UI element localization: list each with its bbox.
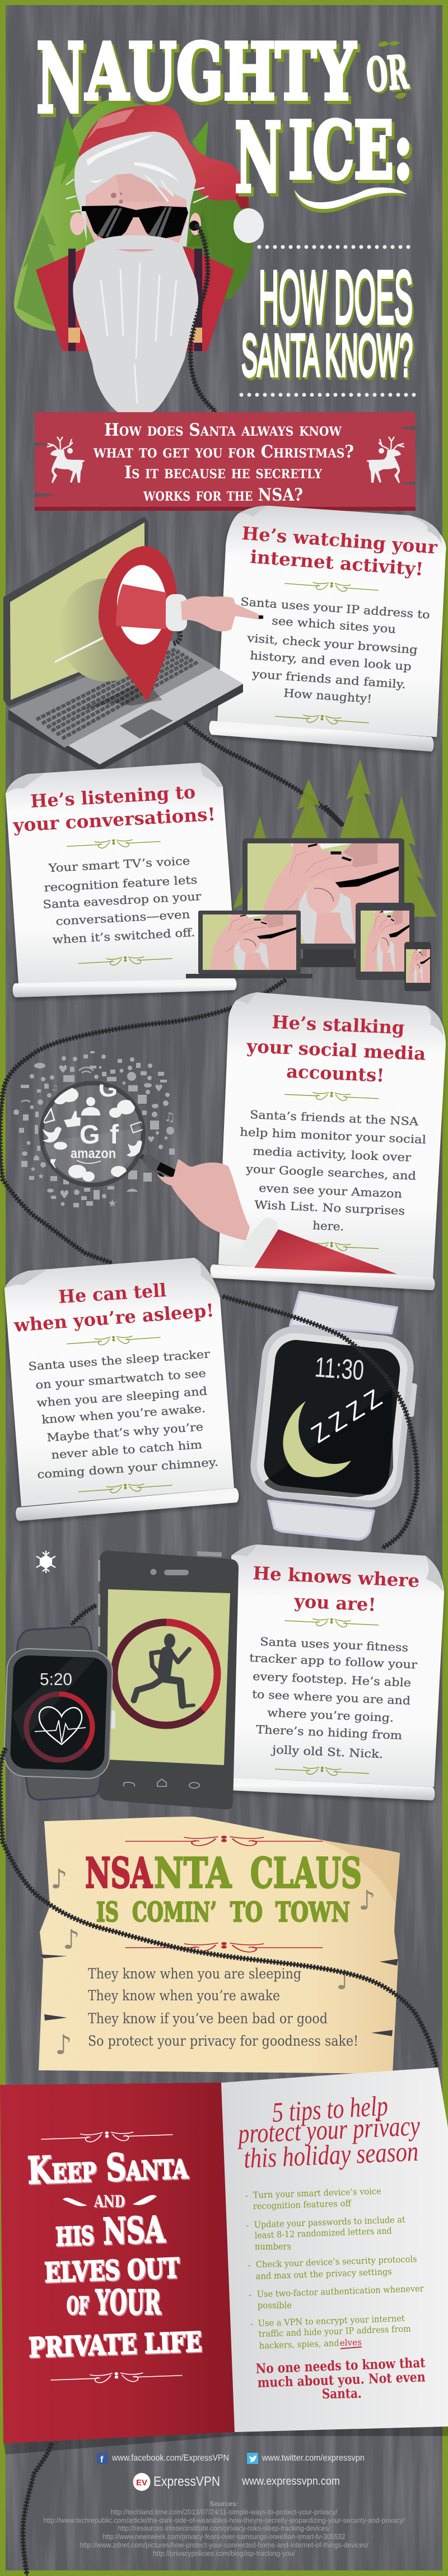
body text: Santa eavesdrop on your: [43, 889, 202, 911]
phone nav icons: [124, 1779, 199, 1788]
ornament bottom: [125, 1943, 323, 1952]
green sack with trees: [14, 100, 253, 331]
footer: sources: http://privacypolicies.com/blog/isp-tracking-you/: [153, 2550, 296, 2558]
flourishes beside AND: [63, 2195, 157, 2206]
illustration: pine trees: [233, 759, 437, 917]
footer: ExpressVPN logo and URL: ExpressVPN: [153, 2474, 220, 2489]
title: Naughty or Nice: [36, 22, 416, 217]
body text: [249, 1635, 418, 1761]
earpiece cord: [189, 221, 216, 412]
tips list: possible: [258, 2300, 292, 2311]
heart with ECG line: [35, 1707, 86, 1744]
hair: [66, 132, 208, 246]
body text: to see where you are and: [252, 1687, 411, 1707]
red jacket with suspenders: [36, 248, 234, 351]
heading: [13, 1280, 215, 1336]
footer: sources: http://www.techrepublic.com/article/the-dark-side-of-wearables-how-theyre-secretly-jeopardizing-your-security-and-privacy/: [44, 2517, 405, 2524]
heading: He’s listening to: [30, 781, 196, 812]
body text: [43, 854, 202, 946]
scattered grey icons: ★: [163, 1134, 169, 1142]
call to action text: PRIVATE LIFE: [28, 2326, 202, 2364]
phone cord: behind phone and watch: [72, 1606, 96, 1625]
screen: [10, 1655, 108, 1771]
runner silhouette: [134, 1634, 194, 1706]
body text: help him monitor your social: [240, 1125, 427, 1146]
ornament partly hidden by sleeve: [284, 1240, 379, 1252]
illustration: Santa's arm holding magnifier: [157, 1159, 397, 1274]
cuff: [239, 1217, 278, 1266]
music notes: ♪: [336, 1964, 353, 1996]
paper scroll: [231, 1544, 444, 1800]
tips list: -: [246, 2220, 249, 2230]
tips list: -: [248, 2260, 250, 2270]
body text: here.: [312, 1219, 344, 1233]
lyrics: They know when you are sleeping: [88, 1966, 301, 1982]
title: Naughty or Nice: N: [36, 22, 85, 134]
heading: He’s watching your: [241, 522, 438, 558]
scattered grey icons: ♫: [164, 1110, 175, 1124]
heading: NTA: [154, 1849, 232, 1897]
body text: when you are sleeping and: [36, 1384, 208, 1410]
body text: tracker app to follow your: [249, 1651, 418, 1672]
body text: Santa uses the sleep tracker: [28, 1347, 211, 1373]
scattered grey icons: ★: [30, 1165, 36, 1174]
laptop base: [8, 641, 243, 771]
panel: He's watching your internet activity: [209, 506, 446, 752]
lyrics: They know when you’re awake: [88, 1987, 280, 2004]
tips list: Turn your smart device’s voice: [253, 2186, 381, 2200]
body text: see which sites you: [272, 614, 396, 636]
phone cord: across smartwatch: [223, 1296, 417, 1548]
heading: COMIN’: [132, 1897, 217, 1928]
white icons inside lens: amazon: [71, 1146, 116, 1161]
heading: you are!: [293, 1590, 376, 1616]
call to action text: [27, 2143, 203, 2365]
tips list: Update your passwords to include at: [254, 2215, 406, 2230]
body text: [240, 1108, 427, 1233]
body text: recognition feature lets: [44, 873, 198, 894]
body text: Santa uses your IP address to: [240, 595, 430, 622]
footer: sources: Sources:: [209, 2500, 239, 2508]
tablet: [356, 903, 414, 980]
call to action text: Keep Santa: [27, 2143, 189, 2192]
tips list: [245, 2186, 424, 2351]
banner text: [93, 420, 354, 505]
scattered grey icons: ★: [38, 1172, 45, 1181]
body text: your Google searches, and: [245, 1162, 417, 1183]
body text: history, and even look up: [250, 648, 412, 673]
banner: intro question: [35, 412, 416, 511]
body text: even see your Amazon: [259, 1181, 403, 1201]
script heading: [236, 2089, 421, 2174]
illustration: smart TV and devices showing Santa spying: [186, 838, 431, 991]
banner text: How does Santa always know: [104, 420, 342, 440]
sleeve: [254, 1229, 397, 1274]
heading: [85, 1849, 362, 1928]
ornament: [284, 579, 379, 594]
panel: He's stalking your social media accounts: [211, 992, 446, 1290]
panel: He's listening to your conversations: [6, 763, 237, 997]
footer: sources: http://resources.infosecinstitute.com/privacy-risks-sleep-tracking-devices/: [118, 2524, 330, 2532]
panel: He can tell when you're asleep: [4, 1258, 239, 1521]
call to action text: and: [94, 2185, 125, 2213]
tips list: -: [250, 2319, 253, 2329]
tips list: numbers: [255, 2242, 291, 2252]
icon: reindeer right: [366, 437, 404, 483]
heading: internet activity!: [249, 546, 424, 580]
scattered grey icons: ★: [108, 1197, 117, 1210]
paper scroll: [6, 763, 237, 997]
flourish under title: [294, 188, 407, 213]
body text: where you’re going.: [267, 1706, 394, 1724]
title: Naughty or Nice: N: [235, 102, 282, 214]
ornament top: [125, 1836, 323, 1846]
tips list: traffic and hide your IP address from: [259, 2324, 411, 2339]
heading: He can tell: [58, 1280, 167, 1308]
footer: ExpressVPN logo and URL: www.expressvpn.com: [241, 2475, 340, 2488]
body text: Your smart TV’s voice: [48, 854, 190, 875]
title: Naughty or Nice: OR: [364, 45, 410, 102]
logo mark: EV: [136, 2478, 147, 2488]
body text: Santa uses your fitness: [260, 1635, 409, 1654]
music notes: ♪: [55, 2029, 72, 2061]
white icons inside lens: G: [80, 1119, 100, 1149]
scattered grey icons: ♥: [147, 1135, 155, 1145]
heart ring: [26, 1694, 92, 1760]
ornament: [284, 1616, 379, 1628]
icon: twitter: [247, 2453, 258, 2464]
white icons inside lens: [43, 1075, 144, 1182]
scattered grey icons: ♥: [59, 1188, 69, 1201]
dotted divider bottom: [241, 393, 416, 396]
heading: He’s stalking: [272, 1011, 405, 1038]
icon: facebook: [97, 2453, 108, 2465]
body text: [28, 1347, 219, 1481]
scattered grey icons: ♫: [52, 1084, 58, 1093]
icon: reindeer left: [47, 437, 85, 483]
panel: Keep Santa red call to action: [0, 2083, 235, 2443]
strap: [17, 1627, 91, 1652]
banner text: Is it because he secretly: [124, 463, 322, 483]
body: [3, 1648, 113, 1779]
heading: accounts!: [286, 1061, 385, 1086]
footer: social links: [97, 2453, 365, 2465]
closing statement: [255, 2354, 426, 2402]
call to action text: ELVES OUT: [44, 2253, 180, 2289]
footer: sources: http://techland.time.com/2013/07/24/11-simple-ways-to-protect-your-privacy/: [111, 2508, 338, 2516]
heading: when you’re asleep!: [13, 1300, 215, 1336]
call to action text: his NSA: [56, 2210, 167, 2256]
subtitle: How does Santa know?: [241, 256, 414, 391]
monitor: [242, 838, 404, 967]
phone cord: footer: [23, 2443, 52, 2575]
heading: NSA: [85, 1849, 153, 1897]
illustration: laptop with location pin and pointing hand: [3, 516, 263, 771]
body text: your friends and family.: [251, 667, 407, 691]
body text: Maybe that’s why you’re: [46, 1420, 204, 1444]
tips list: Check your device’s security protocols: [256, 2254, 417, 2270]
sleeping letters: ZZZZ: [306, 1384, 386, 1448]
heading: your social media: [246, 1035, 426, 1065]
white icons inside lens: G: [99, 1075, 118, 1102]
illustration: Santa with sunglasses and earpiece: [14, 100, 264, 412]
watch screen: [262, 1338, 402, 1497]
heading: [12, 781, 216, 836]
heading: [246, 1011, 426, 1086]
body text: coming down your chimney.: [37, 1455, 219, 1481]
laptop keyboard: [36, 648, 198, 739]
time: 11:30: [314, 1351, 365, 1386]
heading: He knows where: [253, 1562, 420, 1592]
dotted divider top: [259, 245, 416, 249]
script heading: 5 tips to help: [271, 2089, 389, 2128]
banner text: what to get you for Christmas?: [93, 442, 354, 462]
ornament bottom: [50, 2370, 183, 2384]
tips list: Use a VPN to encrypt your internet: [258, 2313, 405, 2328]
body text: never able to catch him: [51, 1438, 203, 1462]
laptop trackpad: [120, 709, 173, 739]
heading: your conversations!: [12, 804, 216, 836]
phone: [404, 942, 431, 991]
body text: know when you’re awake.: [41, 1402, 206, 1426]
ornament: [78, 954, 172, 967]
strap bottom: [268, 1501, 374, 1539]
body text: jolly old St. Nick.: [271, 1743, 384, 1761]
moon: [283, 1401, 351, 1477]
Santa hat: [78, 105, 249, 209]
ornament: [78, 1481, 172, 1495]
heading: TOWN: [276, 1897, 350, 1928]
face: [70, 174, 201, 246]
panel shadow: [3, 2426, 448, 2454]
body text: when it’s switched off.: [52, 926, 195, 946]
call to action text: and: [95, 2186, 126, 2214]
closing statement: Santa.: [322, 2385, 362, 2402]
phone screen: [106, 1589, 230, 1765]
scattered grey icons: ♥: [58, 1063, 68, 1076]
phone body: [99, 1551, 239, 1809]
tips list: recognition features off: [253, 2198, 352, 2211]
paper scroll: [4, 1258, 239, 1521]
illustration: smartwatch with sleep tracker: [248, 1292, 417, 1539]
panel: NSAnta Claus poster: [39, 1817, 400, 2074]
side button: [406, 1383, 417, 1417]
body text: conversations—even: [55, 907, 190, 928]
call to action text: of YOUR: [67, 2283, 161, 2322]
paper scroll: [211, 992, 446, 1290]
ornament: [275, 712, 369, 726]
activity ring: [114, 1622, 217, 1725]
music notes: [50, 1864, 376, 2061]
heading: CLAUS: [250, 1849, 362, 1897]
tips list: and max out the privacy settings: [256, 2267, 392, 2281]
scattered grey icons: ♥: [155, 1083, 163, 1094]
lyrics: [88, 1966, 358, 2049]
heading: [253, 1562, 420, 1616]
banner text: works for the NSA?: [143, 485, 303, 505]
lyrics: So protect your privacy for goodness sake!: [88, 2033, 358, 2049]
body text: on your smartwatch to see: [35, 1366, 207, 1392]
scattered grey icons: ★: [121, 1079, 127, 1087]
ornament: [67, 837, 161, 850]
music notes: ♪: [50, 1864, 68, 1895]
illustration: fitness watch with heart rate: [3, 1627, 115, 1800]
parchment: [39, 1817, 400, 2074]
button: [109, 1711, 115, 1729]
tips list: elves: [340, 2337, 362, 2348]
footer: social links: www.facebook.com/ExpressVPN: [111, 2453, 229, 2463]
footer: ExpressVPN logo and URL: [133, 2473, 340, 2491]
tips list: -: [245, 2191, 248, 2201]
panel: He knows where you are: [231, 1544, 444, 1800]
music notes: ♪: [63, 1924, 80, 1956]
body text: There’s no hiding from: [256, 1723, 403, 1742]
panel: 5 tips: [221, 2068, 448, 2432]
Santa cord stub: [172, 632, 180, 644]
watch body: [248, 1323, 417, 1510]
location pin: [99, 546, 177, 702]
body text: Santa’s friends at the NSA: [250, 1108, 419, 1128]
ornament: [284, 1090, 379, 1102]
call to action text: of YOUR: [68, 2284, 162, 2323]
white icons inside lens: f: [110, 1120, 119, 1150]
illustration: social media icons under a magnifier: [13, 1051, 175, 1210]
scattered grey icons: [13, 1051, 175, 1210]
body text: [240, 595, 430, 706]
title: Naughty or Nice: OR: [366, 47, 412, 104]
hat pom-pom: [234, 208, 264, 243]
icon: snowflake: [36, 1551, 55, 1573]
body text: How naughty!: [283, 686, 372, 706]
body text: every footstep. He’s able: [253, 1669, 412, 1690]
phone cord segment behind devices: [325, 806, 343, 825]
tips list: Use two-factor authentication whenever: [257, 2284, 424, 2299]
footer: sources: http://www.newsweek.com/privacy-fears-over-samsungs-orwellian-smart-tv-305532: [103, 2533, 346, 2541]
pointing hand: [166, 594, 263, 631]
small laptop: [186, 911, 312, 978]
heading: TO: [230, 1897, 263, 1928]
ornament top: [41, 2130, 173, 2144]
call to action text: PRIVATE LIFE: [29, 2327, 203, 2365]
body text: visit, check your browsing: [246, 631, 418, 656]
strap top: [290, 1292, 397, 1333]
phone cord: laptop to devices: [185, 722, 343, 825]
phone cord: devices to social icons: [0, 980, 286, 1263]
ornament: [275, 1765, 369, 1777]
music notes: ♪: [358, 1885, 376, 1916]
magnifier lens: [41, 1083, 143, 1185]
tips list: hackers, spies, and: [259, 2338, 339, 2351]
beard: [73, 235, 198, 412]
heading: IS: [96, 1897, 119, 1928]
paper scroll: [209, 506, 446, 752]
icon: facebook: f: [100, 2455, 104, 2465]
laptop screen: [3, 516, 155, 707]
call to action text: his NSA: [55, 2209, 166, 2255]
tips list: -: [249, 2290, 251, 2300]
title: Naughty or Nice: N: [39, 26, 87, 138]
lyrics: They know if you’ve been bad or good: [88, 2010, 328, 2027]
illustration: smartphone with fitness app: [98, 1551, 239, 1809]
phone cord: across poster: [0, 1748, 437, 2066]
magnifier handle: [141, 1156, 150, 1163]
call to action text: ELVES OUT: [45, 2254, 181, 2290]
body text: Wish List. No surprises: [254, 1198, 405, 1217]
body text: media activity, look over: [253, 1144, 412, 1164]
time: 5:20: [40, 1669, 72, 1689]
footer: sources: http://www.zdnet.com/pictures/how-protect-your-connected-home-and-internet-of-things-devices/: [80, 2541, 369, 2549]
ornament: [67, 1333, 161, 1347]
sunglasses: [82, 206, 188, 240]
heading: [241, 522, 438, 580]
logo mark: [133, 2473, 150, 2491]
call to action text: Keep Santa: [28, 2144, 190, 2194]
footer: social links: www.twitter.com/expressvpn: [262, 2453, 365, 2463]
tips list: least 8-12 randomized letters and: [255, 2225, 392, 2241]
footer: sources: [44, 2500, 405, 2558]
title: Naughty or Nice: N: [237, 105, 284, 217]
